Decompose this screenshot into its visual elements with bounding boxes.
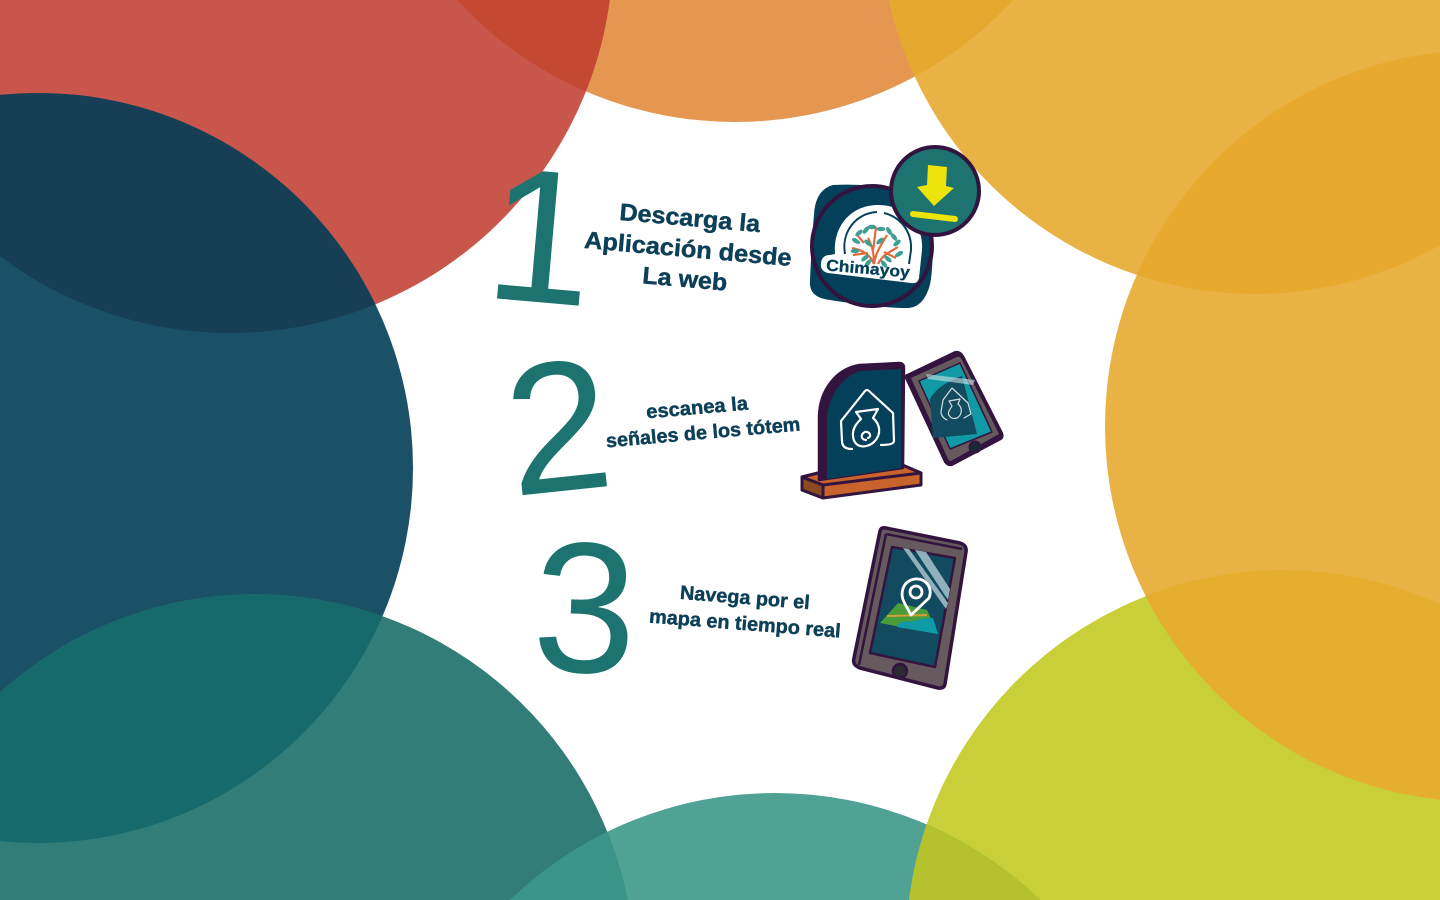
map water — [897, 618, 938, 634]
overlap: teal left and teal bottom — [510, 832, 628, 900]
logo wordmark: Chimayoy — [825, 257, 911, 282]
icon: phone with map — [854, 528, 966, 688]
map road — [887, 615, 927, 616]
totem base top — [802, 464, 921, 485]
phone button — [893, 664, 907, 678]
leaves — [850, 225, 904, 269]
step 2 text — [605, 393, 801, 452]
circle: orange top — [357, 0, 1113, 122]
icon: phone scanning — [905, 352, 1003, 465]
number 1: 1 — [479, 127, 603, 347]
step 1 line 3: La web — [641, 262, 728, 297]
number 2: 2 — [496, 319, 620, 536]
overlap: yellow and right orange — [1136, 52, 1440, 294]
phone body — [854, 528, 966, 688]
download arrow — [917, 165, 954, 206]
branches — [852, 227, 898, 264]
phone screen totem — [930, 376, 977, 438]
phone body — [905, 352, 1003, 465]
step 3 line 2: mapa en tiempo real — [648, 605, 841, 642]
phone screen — [919, 363, 992, 449]
overlap: dark blue and red — [0, 93, 376, 333]
totem symbol — [841, 390, 894, 449]
download bar — [913, 214, 955, 219]
step 3 line 1: Navega por el — [679, 582, 811, 614]
phone edge — [859, 534, 962, 665]
step 1 line 1: Descarga la — [618, 199, 762, 238]
screen glare — [926, 374, 975, 385]
step 2 line 1: escanea la — [645, 393, 749, 423]
tree — [850, 225, 904, 269]
overlap: red and orange — [457, 0, 610, 92]
circle: red top left — [0, 0, 613, 333]
icon: totem — [802, 363, 921, 498]
overlap: teal left and dark blue — [0, 594, 382, 843]
pin centre — [910, 586, 922, 598]
circle: yellow top right — [880, 0, 1440, 294]
step 3 text — [648, 582, 841, 642]
step 1 line 2: Aplicación desde — [583, 227, 793, 272]
circle: yellow green bottom right — [909, 570, 1440, 900]
circle: teal bottom center — [510, 793, 1040, 900]
white badge — [821, 205, 922, 283]
overlap: right orange and green — [1146, 570, 1440, 800]
screen symbol — [941, 388, 971, 420]
app blob — [810, 185, 933, 308]
totem base — [802, 464, 921, 498]
circle: teal bottom left — [0, 594, 628, 900]
circle: dark blue left — [0, 93, 413, 843]
phone button — [970, 442, 980, 452]
number 3: 3 — [530, 503, 640, 714]
map pin — [902, 579, 930, 615]
overlap: teal and green — [909, 824, 1040, 900]
icon: app logo with download — [810, 147, 979, 308]
overlap: orange and yellow — [889, 0, 1013, 76]
circle: orange right — [1105, 50, 1440, 802]
map land — [880, 603, 938, 634]
totem slab — [819, 363, 904, 480]
app ring — [812, 186, 932, 306]
phone screen — [870, 547, 955, 667]
download badge — [891, 147, 979, 235]
totem face — [827, 369, 901, 479]
totem base side — [802, 477, 823, 498]
step 2 line 2: señales de los tótem — [605, 414, 801, 452]
screen glare — [903, 548, 950, 609]
step 1 text — [583, 199, 793, 297]
logo arc — [844, 212, 911, 264]
phone bezel — [911, 357, 999, 461]
